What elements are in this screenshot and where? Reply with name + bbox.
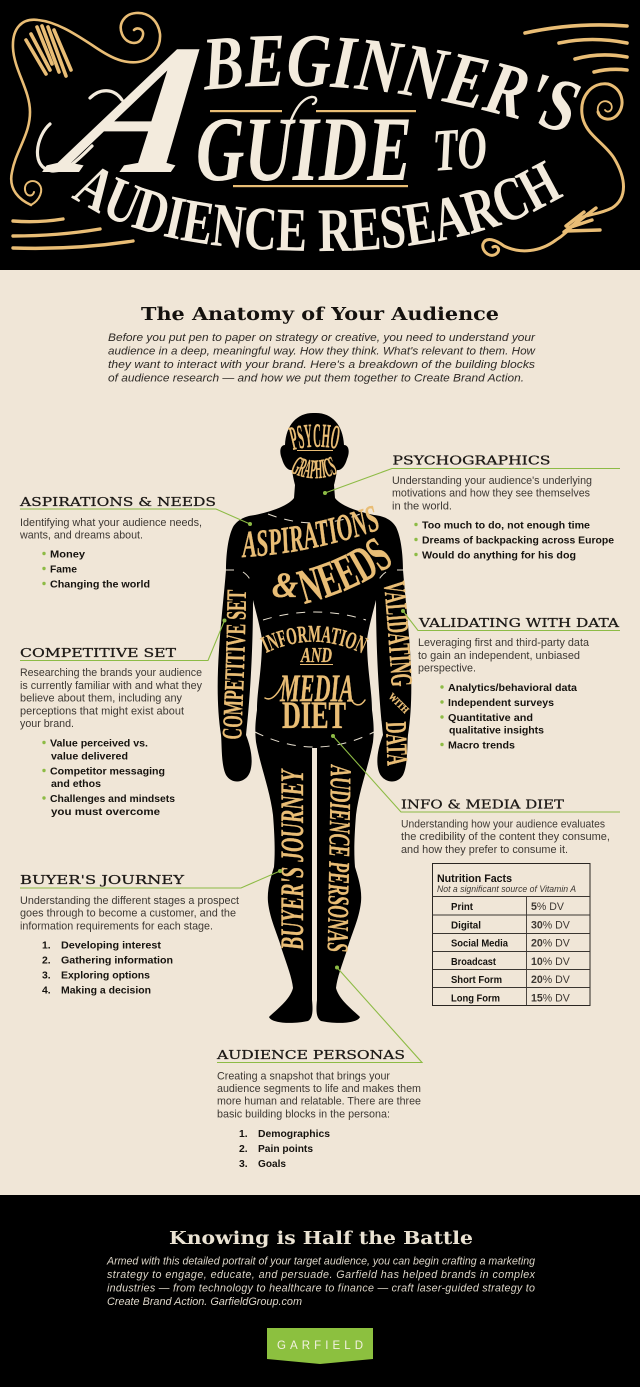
- label: AND: AND: [300, 643, 332, 667]
- callout: competitive set: [20, 618, 226, 818]
- nutrition facts table: Social Media: [451, 938, 508, 950]
- footer paragraph: Create Brand Action. GarfieldGroup.com: [107, 1296, 302, 1308]
- numbered list: [42, 940, 173, 996]
- intro section: [108, 305, 536, 384]
- label: COMPETITIVE SET: COMPETITIVE SET: [222, 590, 246, 739]
- bullet list: Quantitative and: [448, 713, 533, 724]
- bullet list: Independent surveys: [448, 698, 554, 709]
- numbered list: Developing interest: [61, 940, 162, 952]
- footer paragraph: industries — from technology to healthcare to finance — craft laser-guided strategy to: [107, 1282, 535, 1294]
- body silhouette with lettering: [218, 413, 414, 1023]
- intro paragraph: Before you put pen to paper on strategy or creative, you need to understand your: [108, 332, 535, 344]
- callout: audience personas: [216, 966, 422, 1170]
- paper background: [0, 270, 640, 1195]
- nutrition facts table: 10% DV: [531, 956, 571, 968]
- label: AND: [300, 643, 333, 667]
- description: the credibility of the content they consume,: [401, 831, 610, 843]
- intro heading: The Anatomy of Your Audience: [141, 305, 499, 325]
- connector: [20, 509, 252, 526]
- bullet list: Too much to do, not enough time: [422, 520, 590, 532]
- footer panel: [0, 1195, 640, 1387]
- title: TO: TO: [431, 114, 489, 184]
- numbered list: Demographics: [258, 1129, 330, 1140]
- ornament: right speed lines: [525, 25, 627, 72]
- footer paragraph: strategy to engage, educate, and persuade. Garfield has helped brands in complex: [107, 1269, 536, 1281]
- ornament: left scroll frame: [11, 13, 160, 205]
- numbered list: Pain points: [258, 1144, 313, 1155]
- label: VALIDATING: VALIDATING: [384, 580, 412, 686]
- numbered list: Making a decision: [61, 986, 151, 996]
- nutrition facts table: 20% DV: [531, 974, 571, 986]
- bullet list: Macro trends: [448, 740, 515, 752]
- nutrition facts table: 15% DV: [531, 992, 571, 1004]
- bullet list: Value perceived vs.: [50, 738, 148, 750]
- numbered list: 1.: [239, 1129, 248, 1140]
- heading: VALIDATING WITH DATA: [418, 615, 620, 630]
- nutrition facts table: Digital: [451, 920, 481, 932]
- callout: info and media diet: [331, 734, 620, 1006]
- title: GUIDE: GUIDE: [196, 98, 412, 200]
- nutrition facts table: Nutrition Facts: [437, 873, 512, 885]
- ornament: left lower spiral: [25, 181, 41, 205]
- description: Creating a snapshot that brings your: [217, 1070, 390, 1082]
- logo: Garfield: GARFIELD: [277, 1340, 363, 1352]
- ornament: left speed lines: [13, 219, 133, 248]
- heading: COMPETITIVE SET: [20, 645, 177, 660]
- heading: ASPIRATIONS & NEEDS: [19, 494, 216, 509]
- bullet list: Challenges and mindsets: [50, 794, 175, 805]
- intro paragraph: of audience research — and how we put them together to Create Brand Action.: [108, 372, 524, 384]
- connector: [401, 609, 620, 630]
- ornament: right scroll frame: [483, 84, 624, 255]
- bullet list: Competitor messaging: [50, 766, 165, 778]
- nutrition facts table: 20% DV: [531, 938, 571, 950]
- description: is currently familiar with and what they: [20, 680, 203, 692]
- description: your brand.: [20, 718, 74, 730]
- intro paragraph: audience in a deep, meaningful way. How they think. What's relevant to them. How: [108, 346, 536, 358]
- nutrition facts table: Broadcast: [451, 957, 496, 968]
- bullet list: Analytics/behavioral data: [448, 683, 577, 694]
- label: DIET: DIET: [282, 694, 346, 737]
- description: in the world.: [392, 500, 452, 512]
- description: information requirements for each stage.: [20, 920, 213, 932]
- description: [401, 818, 610, 856]
- description: audience segments to life and makes them: [217, 1083, 421, 1095]
- bullet list: and ethos: [51, 779, 101, 790]
- heading: AUDIENCE PERSONAS: [216, 1047, 405, 1062]
- ornament: right leaf: [564, 208, 600, 232]
- numbered list: Gathering information: [61, 956, 173, 966]
- bullet list: Would do anything for his dog: [422, 550, 576, 562]
- numbered list: 4.: [42, 986, 51, 996]
- bullet list: [42, 550, 150, 590]
- label: BUYER'S JOURNEY: BUYER'S JOURNEY: [275, 768, 311, 951]
- label: MEDIA: MEDIA: [279, 667, 354, 710]
- connector: [323, 468, 620, 495]
- label: ASPIRATIONS: ASPIRATIONS: [242, 506, 379, 558]
- nutrition facts table: Print: [451, 902, 473, 913]
- nutrition facts table: 5% DV: [531, 901, 565, 913]
- bullet list: value delivered: [51, 752, 128, 762]
- numbered list: 3.: [239, 1159, 248, 1170]
- description: perspective.: [418, 662, 476, 674]
- heading: INFO & MEDIA DIET: [401, 796, 565, 812]
- nutrition facts table: Long Form: [451, 994, 500, 1004]
- bullet list: you must overcome: [51, 807, 160, 818]
- bullet list: Money: [50, 550, 85, 560]
- description: Identifying what your audience needs,: [20, 517, 202, 529]
- label: PSYCHO: PSYCHO: [288, 424, 340, 450]
- connector: [331, 734, 620, 812]
- header banner: [0, 0, 640, 270]
- description: [217, 1070, 421, 1120]
- description: basic building blocks in the persona:: [217, 1108, 390, 1120]
- description: Leveraging first and third-party data: [418, 637, 589, 649]
- connector: [20, 618, 226, 660]
- nutrition facts table: [432, 864, 590, 1006]
- title: BEGINNER'S: BEGINNER'S: [204, 36, 582, 130]
- description: [392, 475, 592, 512]
- numbered list: Exploring options: [61, 970, 150, 982]
- description: [20, 667, 203, 730]
- numbered list: 3.: [42, 970, 51, 982]
- description: Understanding the different stages a prospect: [20, 895, 239, 907]
- bullet list: [42, 738, 175, 818]
- callout: validating with data: [401, 609, 620, 752]
- description: goes through to become a customer, and the: [20, 908, 236, 920]
- bullet list: Dreams of backpacking across Europe: [422, 536, 614, 546]
- title: AUDIENCE RESEARCH: AUDIENCE RESEARCH: [71, 160, 564, 252]
- connector: [217, 966, 422, 1062]
- description: Understanding your audience's underlying: [392, 475, 592, 487]
- logo: Garfield: [267, 1328, 373, 1364]
- heading: BUYER'S JOURNEY: [20, 872, 185, 887]
- nutrition facts table: Short Form: [451, 975, 502, 986]
- connector: [20, 869, 282, 888]
- description: to gain an independent, unbiased: [418, 650, 580, 662]
- callout: buyer's journey: [20, 869, 282, 996]
- description: [418, 637, 589, 674]
- label: ampersand: &: [272, 565, 298, 605]
- nutrition facts table: Not a significant source of Vitamin A: [437, 884, 576, 894]
- label: NEEDS: NEEDS: [296, 538, 391, 604]
- callout: psychographics: [323, 452, 620, 562]
- description: [19, 517, 202, 542]
- label: DATA: DATA: [379, 721, 414, 766]
- intro paragraph: [108, 332, 536, 384]
- bullet list: [414, 520, 614, 562]
- label: MEDIA: [265, 667, 365, 710]
- bullet list: [440, 683, 577, 752]
- numbered list: 2.: [42, 956, 51, 966]
- label: INFORMATION: INFORMATION: [260, 626, 369, 654]
- description: Researching the brands your audience: [20, 667, 202, 679]
- description: motivations and how they see themselves: [392, 488, 590, 500]
- numbered list: 2.: [239, 1144, 248, 1155]
- nutrition facts table: 30% DV: [531, 920, 571, 932]
- title: A: A: [21, 6, 263, 213]
- footer paragraph: [106, 1256, 536, 1308]
- label: AUDIENCE PERSONAS: AUDIENCE PERSONAS: [321, 764, 357, 952]
- description: wants, and dreams about.: [19, 530, 143, 542]
- label: GRAPHICS: GRAPHICS: [292, 456, 337, 478]
- bullet list: Fame: [50, 564, 77, 576]
- footer paragraph: Armed with this detailed portrait of your target audience, you can begin crafting a marketing: [106, 1256, 535, 1268]
- ornament: right spiral centre: [598, 101, 612, 112]
- description: more human and relatable. There are three: [217, 1096, 421, 1108]
- description: believe about them, including any: [20, 692, 183, 704]
- description: [20, 895, 239, 932]
- intro paragraph: they want to interact with your brand. Here's a breakdown of the building blocks: [108, 359, 536, 371]
- label: WITH: WITH: [386, 691, 411, 716]
- description: perceptions that might exist about: [20, 706, 184, 718]
- numbered list: Goals: [258, 1159, 286, 1170]
- silhouette: [218, 413, 411, 1023]
- ornament: left feather: [26, 26, 71, 76]
- callout: aspirations and needs: [19, 494, 252, 590]
- bullet list: Changing the world: [50, 580, 150, 590]
- footer heading: Knowing is Half the Battle: [169, 1229, 473, 1249]
- description: Understanding how your audience evaluates: [401, 818, 605, 830]
- bullet list: qualitative insights: [449, 726, 544, 736]
- heading: PSYCHOGRAPHICS: [392, 452, 550, 468]
- numbered list: 1.: [42, 940, 51, 952]
- description: and how they prefer to consume it.: [401, 844, 568, 856]
- numbered list: [239, 1129, 330, 1170]
